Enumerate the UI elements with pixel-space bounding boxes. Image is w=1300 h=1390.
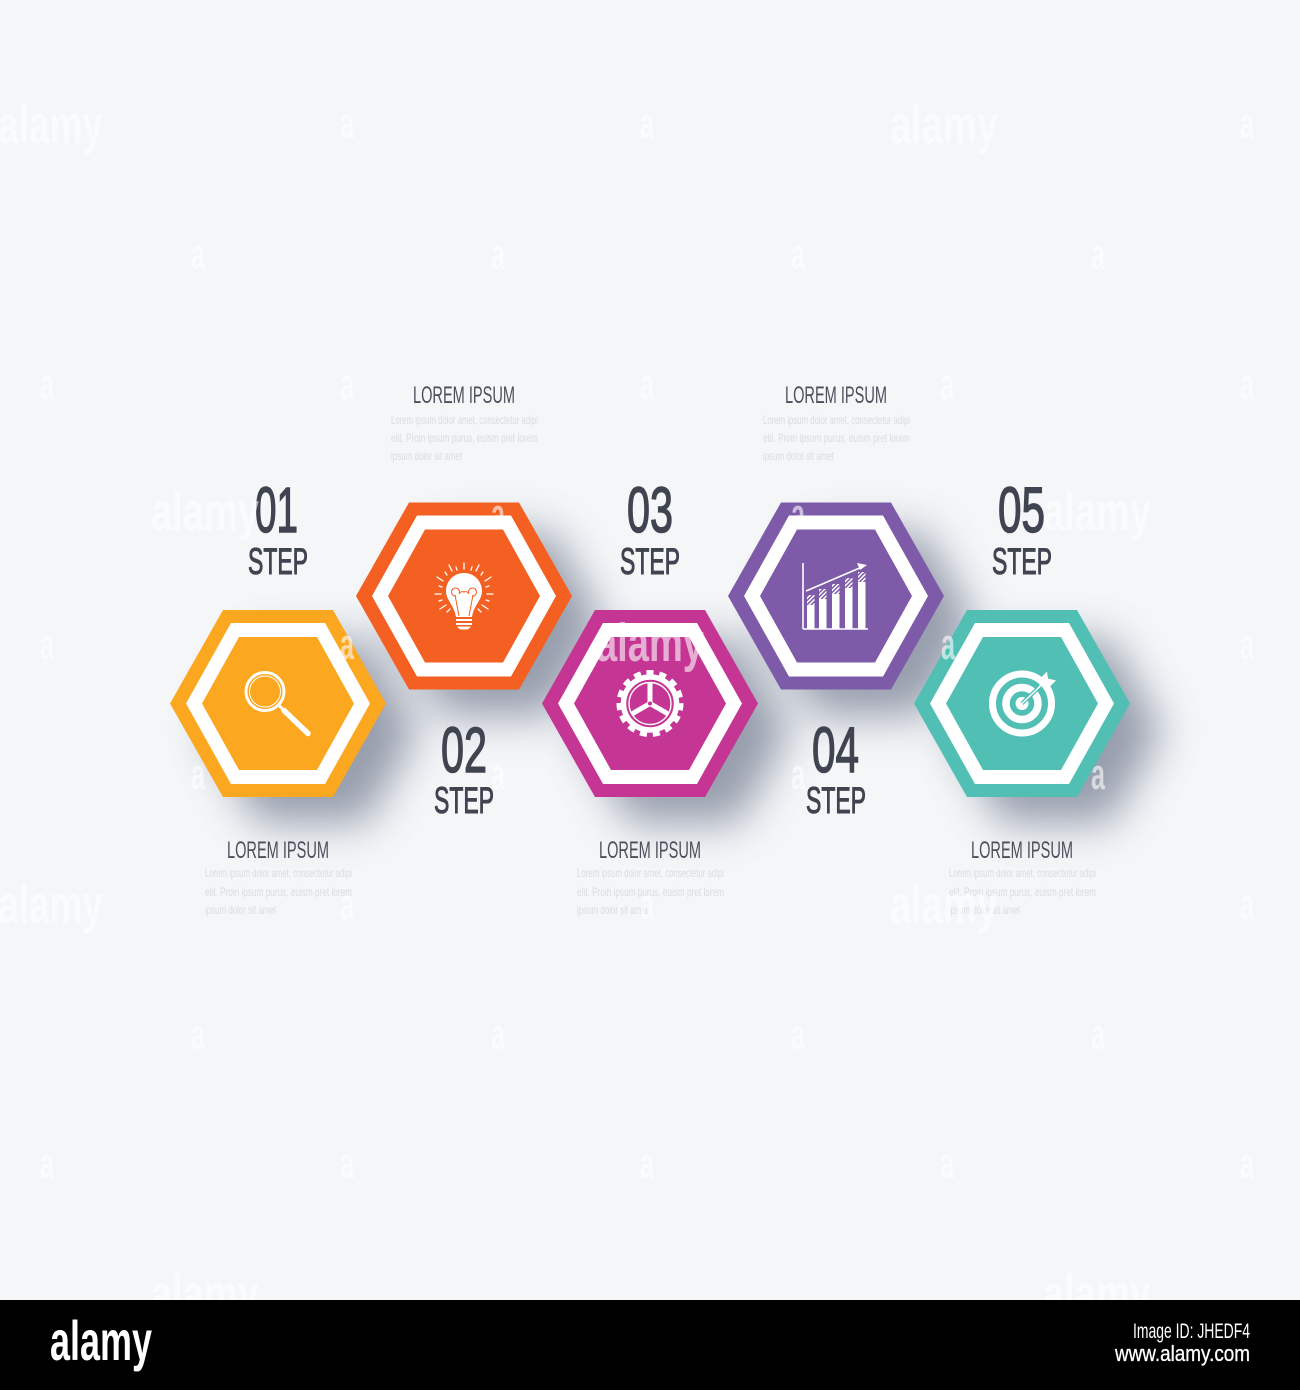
watermark overlay: a — [40, 360, 54, 409]
text block: step 3: LOREM IPSUM — [599, 837, 701, 864]
footer logo: alamy — [50, 1309, 152, 1372]
hexagon 3: magenta, gear — [542, 610, 758, 797]
step 04 label: STEP — [806, 780, 866, 821]
watermark overlay: alamy — [0, 875, 103, 935]
watermark overlay: a — [1091, 230, 1105, 279]
watermark overlay: a — [1091, 750, 1105, 799]
text block: step 3 — [577, 837, 724, 917]
step 03 label: STEP — [620, 541, 680, 582]
watermark overlay: a — [40, 620, 54, 669]
icon: growth bar chart — [803, 563, 868, 629]
watermark overlay: a — [1240, 620, 1254, 669]
watermark overlay: alamy — [0, 95, 103, 155]
step 03 label — [620, 474, 680, 582]
watermark overlay: a — [940, 1139, 954, 1188]
watermark overlay: a — [491, 1010, 505, 1059]
icon: gear — [616, 670, 684, 737]
step 05 label — [992, 474, 1052, 582]
step 04 label: 04 — [812, 714, 859, 786]
step 02 label — [434, 714, 494, 821]
text block: step 3: Lorem ipsum dolor amet, consectetur adipi — [577, 866, 724, 880]
text block: step 1: ipsum dolor sit amet — [205, 903, 276, 917]
watermark overlay: alamy — [151, 1264, 259, 1324]
text block: step 2: elit. Proin ipsum purus, euism pret lorem — [391, 431, 538, 445]
text block: step 1 — [205, 837, 352, 917]
watermark overlay: a — [791, 750, 805, 799]
step 04 label — [806, 714, 866, 821]
text block: step 4: elit. Proin ipsum purus, euism pret lorem — [763, 431, 910, 445]
text block: step 3: ipsum dolor sit amet — [577, 903, 648, 917]
text block: step 2: LOREM IPSUM — [413, 382, 515, 409]
watermark overlay: a — [491, 750, 505, 799]
icon: magnifying glass — [246, 672, 308, 734]
watermark overlay: a — [40, 1139, 54, 1188]
icon: light bulb — [435, 563, 493, 630]
text block: step 1: elit. Proin ipsum purus, euism pret lorem — [205, 885, 352, 899]
watermark overlay: a — [640, 360, 654, 409]
watermark overlay: a — [191, 1010, 205, 1059]
watermark overlay: a — [1240, 1139, 1254, 1188]
watermark overlay: alamy — [1043, 482, 1151, 542]
text block: step 5: ipsum dolor sit amet — [949, 903, 1020, 917]
watermark overlay: a — [940, 360, 954, 409]
step 01 label: STEP — [248, 541, 308, 582]
text block: step 5: Lorem ipsum dolor amet, consectetur adipi — [949, 866, 1096, 880]
watermark overlay: a — [1240, 880, 1254, 929]
watermark overlay: alamy — [596, 613, 704, 673]
text block: step 1: Lorem ipsum dolor amet, consectetur adipi — [205, 866, 352, 880]
watermark overlay: a — [340, 99, 354, 148]
watermark overlay: a — [791, 490, 805, 539]
watermark overlay: a — [941, 620, 955, 669]
watermark overlay: a — [340, 880, 354, 929]
watermark overlay: a — [340, 360, 354, 409]
text block: step 5 — [949, 837, 1096, 917]
text block: step 4: Lorem ipsum dolor amet, consectetur adipi — [763, 413, 910, 427]
watermark overlay: a — [491, 230, 505, 279]
step 01 label: 01 — [255, 474, 298, 546]
watermark overlay: a — [791, 1010, 805, 1059]
watermark overlay: a — [640, 1139, 654, 1188]
watermark overlay: alamy — [151, 482, 259, 542]
text block: step 2: ipsum dolor sit amet — [391, 449, 462, 463]
step 01 label — [248, 474, 308, 582]
text block: step 5: elit. Proin ipsum purus, euism pret lorem — [949, 885, 1096, 899]
watermark overlay: a — [340, 620, 354, 669]
footer bar — [0, 1300, 1300, 1390]
watermark overlay: a — [1240, 99, 1254, 148]
hexagon 5: teal, target — [914, 610, 1130, 797]
step 02 label: 02 — [441, 714, 487, 786]
watermark overlay: a — [191, 750, 205, 799]
hexagon 4: purple, bar chart — [728, 502, 944, 690]
watermark overlay: alamy — [890, 95, 998, 155]
text block: step 4: LOREM IPSUM — [785, 382, 887, 409]
watermark overlay: alamy — [890, 875, 998, 935]
text block: step 2: Lorem ipsum dolor amet, consectetur adipi — [391, 413, 538, 427]
step 05 label: 05 — [998, 474, 1045, 546]
text block: step 2 — [391, 382, 538, 463]
text block: step 1: LOREM IPSUM — [227, 837, 329, 864]
text block: step 3: elit. Proin ipsum purus, euism pret lorem — [577, 885, 724, 899]
watermark overlay: a — [340, 1139, 354, 1188]
text block: step 5: LOREM IPSUM — [971, 837, 1073, 864]
step 03 label: 03 — [627, 474, 673, 546]
step 05 label: STEP — [992, 541, 1052, 582]
watermark overlay: alamy — [1043, 1264, 1151, 1324]
watermark overlay: a — [640, 99, 654, 148]
watermark overlay: a — [191, 230, 205, 279]
watermark overlay: a — [1240, 360, 1254, 409]
hexagon drop shadows — [206, 532, 1162, 823]
step 02 label: STEP — [434, 780, 494, 821]
watermark overlay: a — [491, 490, 505, 539]
watermark overlay: a — [1091, 1010, 1105, 1059]
text block: step 4: ipsum dolor sit amet — [763, 449, 834, 463]
icon: target with arrow — [992, 672, 1056, 733]
watermark overlay: a — [640, 880, 654, 929]
hexagon 1: orange, magnifier — [170, 610, 386, 797]
watermark overlay: a — [791, 230, 805, 279]
website: www.alamy.com — [1114, 1341, 1250, 1366]
hexagon 2: red-orange, light bulb — [356, 502, 572, 690]
text block: step 4 — [763, 382, 910, 463]
